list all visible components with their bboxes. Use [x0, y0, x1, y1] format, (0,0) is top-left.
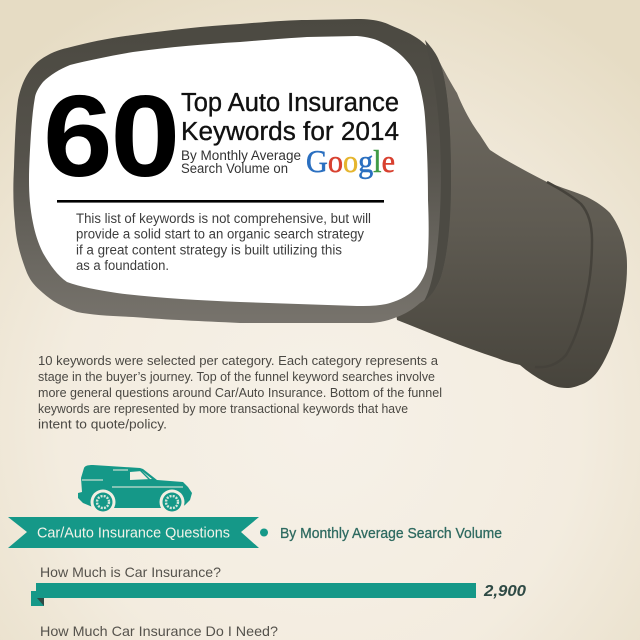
intro text: provide a solid start to an organic search strategy: [76, 226, 364, 242]
intro text: if a great content strategy is built utilizing this: [76, 242, 342, 258]
ribbon banner: [8, 517, 259, 548]
banner label: Car/Auto Insurance Questions: [37, 524, 230, 542]
frame dark edge band: [424, 40, 451, 301]
description paragraph: 10 keywords were selected per category. Each category represents a: [38, 353, 439, 368]
title: Top Auto Insurance: [181, 89, 399, 117]
description paragraph: more general questions around Car/Auto Insurance. Bottom of the funnel: [38, 385, 442, 400]
bullet dot: [260, 528, 268, 536]
front wheel: [90, 490, 116, 514]
description paragraph: keywords are represented by more transactional keywords that have: [38, 401, 408, 416]
mirror housing: [380, 63, 627, 388]
car window: [130, 471, 152, 480]
bar value 1: 2,900: [483, 583, 526, 600]
bar label 2: How Much Car Insurance Do I Need?: [40, 623, 278, 639]
description paragraph: [38, 353, 442, 432]
intro text: [76, 211, 371, 273]
bar label 1: How Much is Car Insurance?: [40, 564, 221, 580]
intro text: This list of keywords is not comprehensive, but will: [76, 211, 371, 226]
subtitle: Search Volume on: [181, 161, 288, 176]
big number 60: 60: [43, 71, 178, 201]
icon: car side mirror: [13, 19, 627, 388]
description paragraph: stage in the buyer’s journey. Top of the funnel keyword searches involve: [38, 369, 435, 384]
mirror frame: [13, 19, 451, 323]
logo: Google: Google: [306, 143, 395, 179]
divider: [57, 200, 384, 203]
bar 1: [31, 583, 476, 606]
car body highlights: [82, 470, 183, 487]
rear wheel: [160, 490, 184, 514]
intro text: as a foundation.: [76, 258, 169, 273]
subtitle: By Monthly Average: [181, 148, 301, 163]
section subtitle: By Monthly Average Search Volume: [280, 525, 502, 542]
housing seam line: [535, 182, 592, 367]
window strut: [140, 470, 150, 480]
description paragraph: intent to quote/policy.: [38, 416, 167, 432]
title: [181, 89, 399, 146]
icon: car: [78, 465, 192, 514]
subtitle: [181, 148, 301, 176]
title: Keywords for 2014: [181, 118, 399, 146]
mirror glass: [29, 36, 429, 306]
